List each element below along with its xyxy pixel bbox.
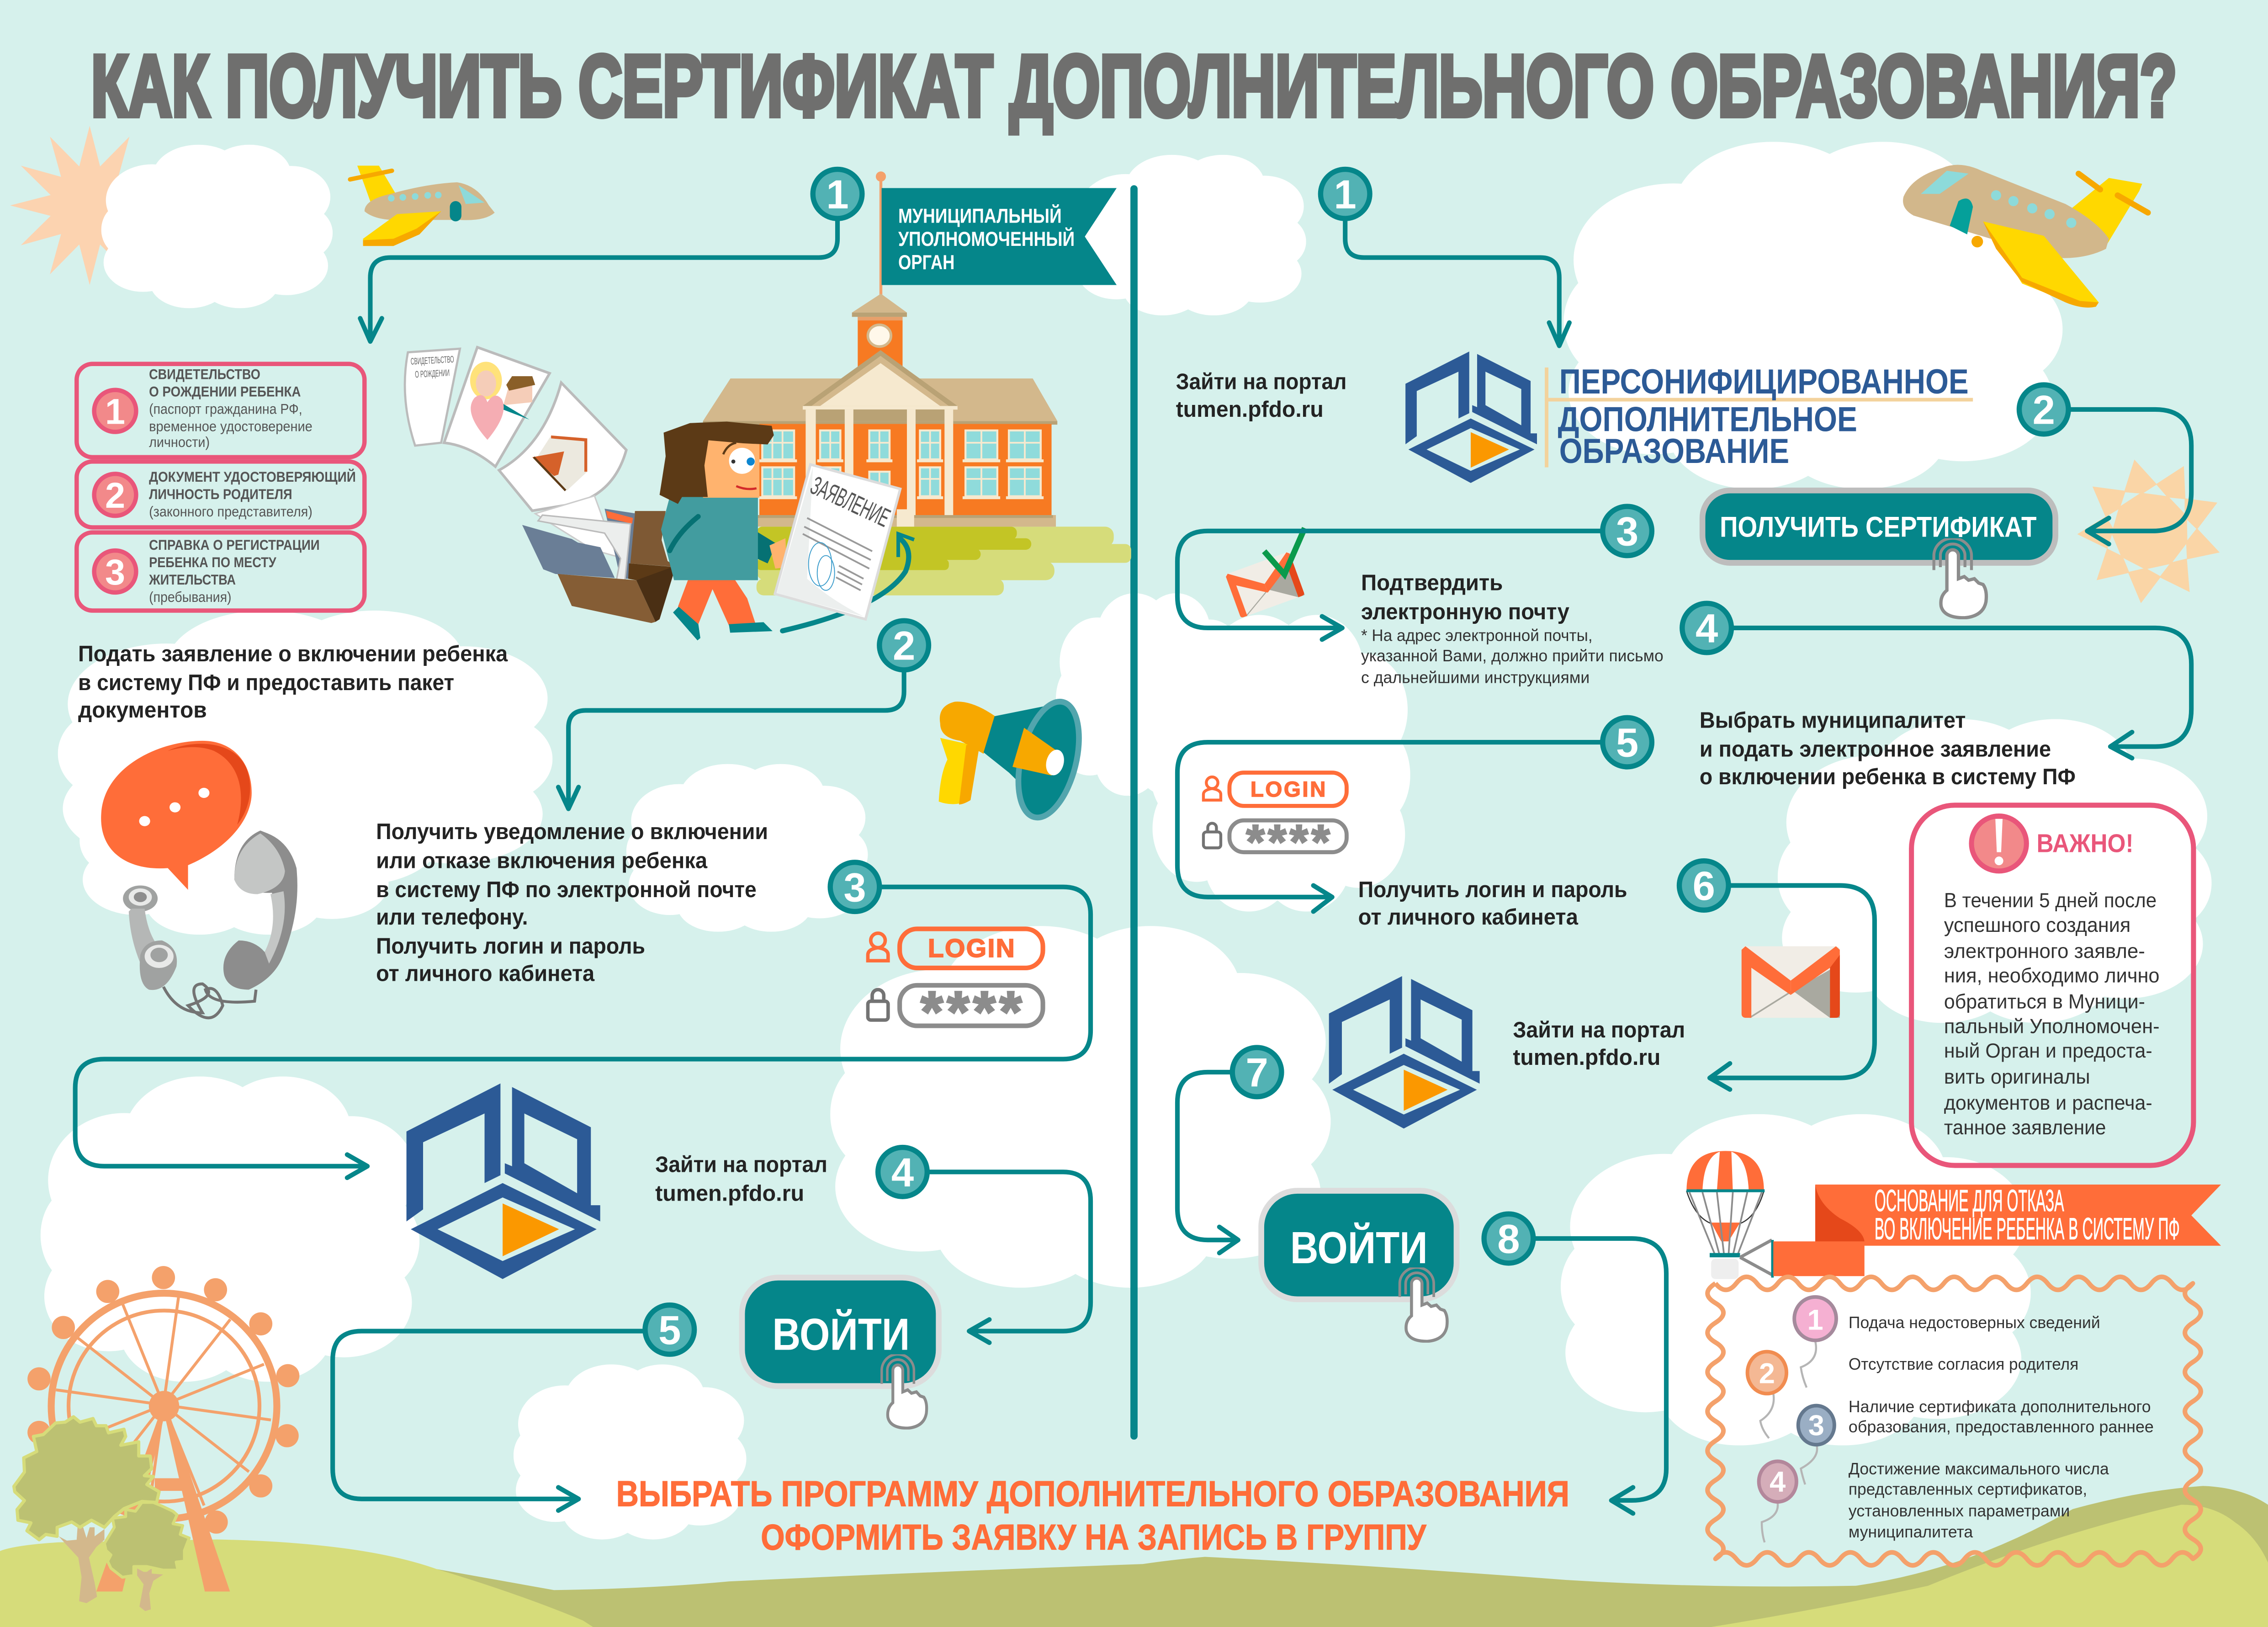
- balloon 1: 1: [1807, 1304, 1823, 1336]
- text: confirm email: * На адрес электронной почты,: [1361, 626, 1593, 644]
- step 8 right: 8: [1497, 1217, 1520, 1262]
- step 5 left: [645, 1305, 694, 1354]
- arrow: right step 8: [1535, 1239, 1666, 1513]
- button: get certificate: [1702, 490, 2056, 618]
- arrow: left step 3: [75, 887, 1091, 1178]
- step 4 right: [1682, 603, 1731, 653]
- item 3: registration certificate: [77, 532, 365, 611]
- step 7 right: 7: [1245, 1050, 1268, 1095]
- text: choose municipality: [1700, 708, 2076, 789]
- item 3: registration certificate: 3: [105, 552, 125, 592]
- callout: important: ный Орган и предоста-: [1944, 1040, 2152, 1062]
- step 7 right: [1232, 1047, 1282, 1097]
- login and password right: ****: [1246, 815, 1330, 868]
- item 1: birth certificate: (паспорт гражданина РФ,: [149, 400, 302, 417]
- item 1: birth certificate: СВИДЕТЕЛЬСТВО: [149, 366, 260, 382]
- text: submit application: документов: [78, 698, 207, 723]
- step 2 left: [880, 621, 928, 670]
- arrow: left step 2: [558, 671, 904, 809]
- text: notification: Получить уведомление о включении: [376, 819, 768, 844]
- balloon 4: [1759, 1462, 1796, 1542]
- item 2: parent's ID: ДОКУМЕНТ УДОСТОВЕРЯЮЩИЙ: [149, 468, 356, 485]
- text: get login right: Получить логин и пароль: [1358, 877, 1627, 902]
- balloon 3: [1798, 1406, 1834, 1484]
- logo: personified education: ОБРАЗОВАНИЕ: [1559, 432, 1789, 471]
- icon: telephone: [123, 830, 297, 1018]
- illustration: building: [703, 294, 1131, 596]
- text: portal right middle: Зайти на портал: [1513, 1018, 1685, 1042]
- list text: муниципалитета: [1849, 1522, 1973, 1541]
- callout: important: [1912, 805, 2194, 1165]
- arrow: right step 2: [2070, 409, 2191, 544]
- icon: sun right: [2077, 459, 2220, 603]
- text: notification: или отказе включения ребенка: [376, 849, 708, 873]
- arrow: right step 5: [1177, 742, 1601, 911]
- item 3: registration certificate: СПРАВКА О РЕГИСТРАЦИИ: [149, 537, 320, 553]
- balloon 2: 2: [1759, 1358, 1775, 1390]
- document: application: [775, 464, 914, 631]
- step 1 right: 1: [1334, 172, 1357, 217]
- balloon 2: [1748, 1352, 1786, 1438]
- text: choose program: [616, 1473, 1569, 1558]
- item 1: birth certificate: временное удостоверение: [149, 418, 313, 434]
- password field: [1229, 820, 1346, 852]
- text: notification: или телефону.: [376, 905, 528, 930]
- callout: important: обратиться в Муници-: [1944, 991, 2145, 1013]
- login and password left: ****: [921, 979, 1022, 1044]
- logo: personified education: [1405, 351, 1973, 483]
- icon: envelope with check: [1225, 528, 1305, 618]
- arrow: right step 3: [1177, 531, 1601, 639]
- callout: important: электронного заявле-: [1944, 940, 2145, 962]
- step 3 right: [1603, 506, 1652, 556]
- button: login right: [1261, 1191, 1457, 1341]
- step 6 right: 6: [1693, 863, 1715, 909]
- icon: hot air balloon: [1686, 1151, 1774, 1279]
- item 2: parent's ID: (законного представителя): [149, 503, 313, 520]
- step 1 left: [813, 169, 862, 218]
- step 4 right: 4: [1696, 606, 1718, 651]
- document: parents passport: [444, 347, 550, 467]
- item 3: registration certificate: РЕБЕНКА ПО МЕСТУ: [149, 554, 276, 570]
- login and password right: LOGIN: [1251, 777, 1325, 802]
- person: [660, 422, 787, 640]
- step 1 left: 1: [826, 172, 849, 217]
- item 1: birth certificate: [77, 364, 365, 457]
- briefcase: [522, 496, 678, 623]
- icon: lock: [1203, 823, 1221, 848]
- icon: mail: [1742, 946, 1840, 1018]
- callout: important: танное заявление: [1944, 1117, 2106, 1139]
- lawn: [757, 526, 1131, 596]
- login field: [900, 929, 1043, 968]
- logo: left: [407, 1084, 600, 1279]
- text: portal right middle: tumen.pfdo.ru: [1513, 1045, 1660, 1070]
- callout: important: В течении 5 дней после: [1944, 889, 2157, 912]
- text: portal right top: Зайти на портал: [1176, 370, 1346, 394]
- arrow: right step 1: [1345, 220, 1569, 346]
- text: confirm email: Подтвердить: [1361, 571, 1503, 596]
- text: confirm email: с дальнейшими инструкциями: [1361, 668, 1590, 686]
- item 1: birth certificate: личности): [149, 434, 210, 450]
- wheel cabins: [27, 1266, 299, 1534]
- arrow: right step 7: [1177, 1072, 1238, 1253]
- step 6 right: [1680, 861, 1728, 910]
- logo: right middle: [1329, 976, 1480, 1128]
- step 3 left: [830, 862, 880, 911]
- document: birth certificate: [405, 349, 460, 446]
- icon: exclamation: [1971, 816, 2026, 871]
- document: birth certificate: СВИДЕТЕЛЬСТВО: [410, 354, 454, 367]
- text: submit application: в систему ПФ и предоставить пакет: [78, 670, 454, 695]
- icon: sun left: [10, 126, 169, 285]
- text: notification: Получить логин и пароль: [376, 934, 645, 958]
- wavy frame: [1707, 1277, 2201, 1565]
- illustration: flying documents: [405, 347, 626, 511]
- list text: Подача недостоверных сведений: [1849, 1313, 2100, 1332]
- icon: hand: [1400, 1267, 1447, 1341]
- arrow: right step 4: [1733, 628, 2191, 758]
- text: choose municipality: Выбрать муниципалитет: [1700, 708, 1966, 733]
- step 4 left: 4: [891, 1150, 914, 1195]
- logo: personified education: ПЕРСОНИФИЦИРОВАННОЕ: [1559, 362, 1969, 401]
- logo: personified education: ДОПОЛНИТЕЛЬНОЕ: [1558, 400, 1857, 439]
- balloon 4: 4: [1770, 1466, 1786, 1498]
- text: get login right: от личного кабинета: [1358, 905, 1579, 930]
- document: birth certificate: О РОЖДЕНИИ: [415, 367, 450, 380]
- text: portal right top: tumen.pfdo.ru: [1176, 397, 1324, 422]
- ribbon: refusal grounds: [1773, 1184, 2221, 1276]
- list text: установленных параметрами: [1849, 1501, 2070, 1520]
- text: portal right middle: [1513, 1018, 1685, 1070]
- text: portal left: [655, 1152, 827, 1206]
- arrow: left step 1: [360, 220, 837, 341]
- icon: hand: [1934, 538, 1986, 618]
- step 5 right: 5: [1616, 720, 1638, 766]
- item 2: parent's ID: [77, 462, 365, 527]
- button: get certificate: ПОЛУЧИТЬ СЕРТИФИКАТ: [1720, 511, 2036, 543]
- callout: important: ния, необходимо лично: [1944, 965, 2160, 987]
- text: portal left: Зайти на портал: [655, 1152, 827, 1177]
- callout: important: документов и распеча-: [1944, 1092, 2152, 1114]
- list text: Достижение максимального числа: [1849, 1459, 2109, 1478]
- illustration: trees: [14, 1417, 189, 1611]
- item 3: registration certificate: (пребывания): [149, 589, 232, 605]
- flag: municipal authority: [876, 171, 1117, 297]
- text: notification: в систему ПФ по электронной почте: [376, 877, 757, 902]
- flag banner: [882, 188, 1117, 285]
- wheel ring: [51, 1293, 277, 1519]
- text: get login right: [1358, 877, 1627, 930]
- item 1: birth certificate: О РОЖДЕНИИ РЕБЕНКА: [149, 383, 301, 399]
- list text: Наличие сертификата дополнительного: [1849, 1397, 2151, 1416]
- step 3 right: 3: [1616, 509, 1638, 554]
- tree large: [14, 1417, 159, 1603]
- arrow: left step 5: [333, 1331, 644, 1510]
- list text: образования, предоставленного раннее: [1849, 1417, 2154, 1436]
- balloon 3: 3: [1808, 1410, 1824, 1442]
- icon: user: [1203, 777, 1221, 800]
- ribbon: refusal grounds: ОСНОВАНИЕ ДЛЯ ОТКАЗА: [1875, 1184, 2064, 1218]
- document: application: ЗАЯВЛЕНИЕ: [806, 471, 895, 533]
- login and password left: LOGIN: [928, 934, 1015, 963]
- list text: [1849, 1313, 2154, 1541]
- password field: [900, 985, 1043, 1026]
- divider axis: [1130, 185, 1138, 1440]
- document: registration: [499, 383, 626, 511]
- icon: megaphone: [939, 696, 1090, 824]
- callout: important: успешного создания: [1944, 914, 2130, 936]
- button: login left: ВОЙТИ: [773, 1309, 910, 1360]
- item 3: registration certificate: ЖИТЕЛЬСТВА: [148, 571, 236, 588]
- step 8 right: [1484, 1214, 1533, 1263]
- callout: important: пальный Уполномочен-: [1944, 1015, 2160, 1037]
- flag text: МУНИЦИПАЛЬНЫЙ: [898, 204, 1062, 228]
- text: choose municipality: о включении ребенка в систему ПФ: [1700, 765, 2076, 789]
- text: choose program: ОФОРМИТЬ ЗАЯВКУ НА ЗАПИСЬ В ГРУППУ: [761, 1517, 1426, 1558]
- icon: large airplane: [1903, 165, 2148, 308]
- icon: speech bubble: [101, 741, 252, 890]
- text: confirm email: электронную почту: [1361, 600, 1570, 624]
- callout: important: вить оригиналы: [1944, 1066, 2090, 1088]
- wheel legs: [96, 1418, 230, 1591]
- flagpole: [880, 178, 881, 297]
- item 2: parent's ID: ЛИЧНОСТЬ РОДИТЕЛЯ: [149, 486, 292, 502]
- step 2 right: [2019, 385, 2068, 434]
- illustration: ferris wheel: [27, 1266, 299, 1591]
- login field: [1229, 773, 1346, 806]
- text: portal left: tumen.pfdo.ru: [655, 1181, 804, 1206]
- list text: Отсутствие согласия родителя: [1849, 1355, 2078, 1373]
- text: portal right top: [1176, 370, 1346, 422]
- button: login left: [742, 1277, 939, 1428]
- step 3 left: 3: [843, 865, 866, 910]
- icon: lock: [868, 989, 888, 1020]
- step 1 right: [1320, 169, 1370, 218]
- flag text: ОРГАН: [898, 251, 954, 274]
- step 2 left: 2: [893, 623, 915, 669]
- login and password right: [1203, 773, 1346, 868]
- hills: [0, 1486, 2268, 1627]
- text: notification: [376, 819, 768, 986]
- step 5 left: 5: [658, 1308, 681, 1353]
- text: choose program: ВЫБРАТЬ ПРОГРАММУ ДОПОЛНИТЕЛЬНОГО ОБРАЗОВАНИЯ: [616, 1473, 1569, 1514]
- text: notification: от личного кабинета: [376, 961, 595, 986]
- item 2: parent's ID: 2: [105, 475, 125, 516]
- panel: refusal grounds list: [1707, 1277, 2201, 1565]
- item 1: birth certificate: 1: [105, 391, 125, 432]
- balloon 1: [1794, 1297, 1836, 1388]
- flag text: [898, 204, 1075, 274]
- text: submit application: Подать заявление о включении ребенка: [78, 642, 508, 666]
- tree small: [105, 1502, 189, 1611]
- text: choose municipality: и подать электронное заявление: [1700, 737, 2051, 762]
- icon: hand: [882, 1354, 927, 1428]
- text: submit application: [78, 642, 508, 723]
- windows: [762, 431, 1041, 515]
- step 5 right: [1603, 718, 1652, 767]
- arrow: right step 6: [1710, 886, 1875, 1090]
- icon: user: [868, 933, 888, 961]
- list text: представленных сертификатов,: [1849, 1479, 2087, 1498]
- step 2 right: 2: [2033, 388, 2055, 433]
- text: confirm email: [1361, 571, 1664, 686]
- login and password left: [868, 929, 1043, 1044]
- flag text: УПОЛНОМОЧЕННЫЙ: [898, 227, 1075, 250]
- illustration: person with briefcase: [522, 422, 787, 640]
- callout: important: ВАЖНО!: [2036, 829, 2134, 858]
- step 4 left: [878, 1148, 927, 1196]
- text: confirm email: указанной Вами, должно прийти письмо: [1361, 646, 1664, 665]
- button: login right: ВОЙТИ: [1290, 1223, 1428, 1273]
- icon: small airplane: [350, 165, 495, 246]
- list: documents: [77, 364, 365, 611]
- arrow: left step 4: [928, 1172, 1091, 1343]
